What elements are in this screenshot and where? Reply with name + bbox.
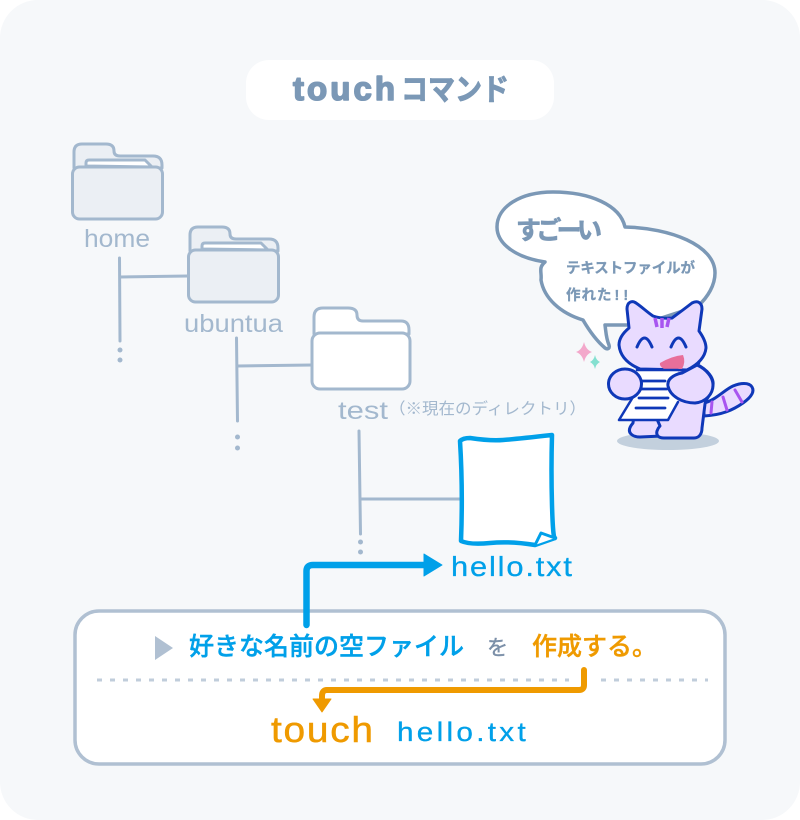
neck line — [684, 363, 699, 373]
bubble text: テキストファイルが — [566, 259, 696, 277]
command: touch: touch — [271, 709, 373, 750]
folder: ubuntua — [188, 227, 278, 302]
title: touch — [293, 70, 395, 107]
head — [619, 302, 706, 370]
body — [640, 364, 713, 438]
character: cat holding paper — [608, 302, 753, 450]
mouth — [660, 355, 684, 369]
arrow: blue to file name — [306, 554, 442, 625]
note: current directory: （※現在のディレクトリ） — [389, 399, 586, 418]
right arm — [668, 365, 713, 403]
instruction: particle: を — [487, 637, 508, 660]
speech bubble: 作れた!! — [566, 287, 629, 304]
instruction: create: 作成する。 — [532, 633, 657, 661]
speech bubble — [497, 192, 715, 349]
icon: new text file — [460, 435, 555, 545]
label: ubuntua: ubuntua — [184, 310, 283, 338]
icon: sparkles — [576, 342, 600, 369]
tree continuation dots — [118, 348, 363, 554]
paper lines — [636, 381, 668, 408]
tail stripes — [711, 390, 742, 413]
left arm — [608, 369, 642, 399]
folder: test — [312, 308, 410, 389]
left leg — [629, 415, 662, 437]
tail — [704, 384, 753, 416]
label: home: home — [84, 225, 150, 253]
divider — [97, 678, 708, 682]
eyes — [637, 338, 686, 347]
paper — [619, 370, 678, 420]
label: test: test — [338, 397, 388, 425]
title — [246, 60, 554, 120]
marker triangle — [155, 636, 173, 660]
label: hello.txt: hello.txt — [451, 551, 572, 583]
command panel — [75, 611, 725, 764]
title: コマンド — [401, 74, 509, 107]
tree connector lines — [120, 258, 460, 534]
shadow — [617, 432, 719, 450]
arrow: orange to touch — [313, 670, 584, 712]
command: filename: hello.txt — [397, 717, 526, 748]
head stripes — [655, 318, 669, 328]
instruction: file name: 好きな名前の空ファイル — [189, 633, 464, 661]
folder: home — [72, 144, 162, 219]
bubble headline: すごーい — [516, 216, 602, 245]
